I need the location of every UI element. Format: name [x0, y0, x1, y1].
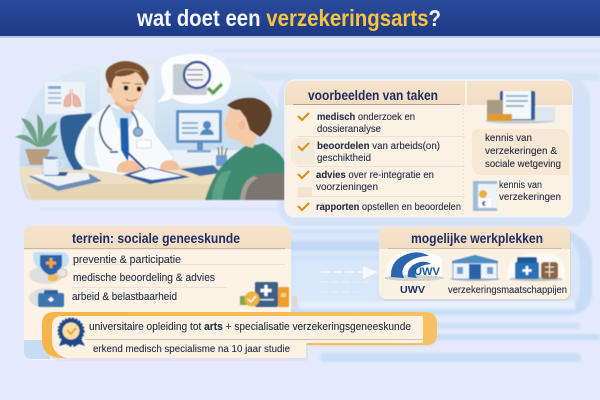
icon: books and coffee cup: [28, 156, 102, 191]
keyboard: [180, 165, 221, 176]
illustration: doctor and client consultation: [15, 54, 297, 200]
icon: verzekeringsmap: €: [482, 201, 486, 208]
arrow: naar werkplekken: [320, 266, 378, 292]
speech bubble with magnifier: [157, 54, 231, 104]
task: beoordelen: [298, 140, 440, 164]
label: UWV: UWV: [400, 285, 425, 296]
text: opleiding: universitaire opleiding tot arts + specialisatie verzekeringsgeneeskunde: [89, 321, 411, 333]
block: kennis van verzekeringen & sociale wetgeving: verzekeringen &: [485, 145, 557, 157]
heading: mogelijke werkplekken: [411, 231, 543, 246]
task: beoordelen: geschiktheid: [317, 152, 371, 164]
icon: UWV logo: UWV: [414, 266, 441, 278]
task: beoordelen: beoordelen van arbeids(on): [317, 140, 440, 152]
clipboard: [123, 167, 190, 184]
task: advies: [298, 169, 434, 193]
callout: opleiding: [42, 312, 437, 360]
icon: shield and pills: [29, 252, 69, 284]
task: medisch: medisch onderzoek en: [317, 111, 415, 123]
desk back surface: [160, 150, 240, 166]
icon: award rosette: [58, 318, 85, 347]
heading: terrein: sociale geneeskunde: [72, 231, 240, 246]
block: kennis van verzekeringen & sociale wetgeving: kennis van: [485, 132, 532, 144]
text: kennis van verzekeringen: kennis van: [499, 180, 542, 191]
list item: preventie: preventie & participatie: [73, 254, 181, 266]
monitor: [176, 110, 222, 152]
text: specialisme: erkend medisch specialisme na 10 jaar studie: [93, 343, 290, 355]
panel: mogelijke werkplekken: [379, 227, 571, 301]
pen holder: [216, 146, 227, 166]
icon: UWV logo: [384, 252, 444, 281]
task: medisch: [298, 111, 415, 135]
heading: voorbeelden van taken: [308, 87, 438, 103]
text: kennis van verzekeringen: verzekeringen: [499, 191, 561, 203]
label: verzekeringsmaatschappijen: verzekeringsmaatschappijen: [448, 285, 567, 296]
block: kennis van verzekeringen & sociale wetgeving: [472, 129, 569, 175]
icon: medical case: [29, 288, 64, 308]
doctor chair: [60, 113, 92, 170]
list item: medische beoordeling: medische beoordeling & advies: [73, 272, 215, 284]
icon: verzekeringsmap: [473, 181, 497, 211]
icon: plant: [15, 114, 58, 165]
doctor: [75, 61, 179, 175]
desk: [20, 165, 220, 200]
title text: wat doet een verzekeringsarts?: [136, 5, 441, 31]
text: kennis van verzekeringen: [499, 180, 561, 203]
icon: lung poster: [45, 82, 85, 114]
block: kennis van verzekeringen & sociale wetgeving: sociale wetgeving: [485, 158, 561, 170]
client: [205, 98, 297, 200]
task: advies: advies over re-integratie en: [316, 169, 434, 181]
icon: medical book and badge: [240, 282, 297, 307]
icon: documents: [485, 91, 555, 124]
panel: voorbeelden van taken: [285, 80, 572, 217]
task: medisch: dossieranalyse: [317, 123, 381, 135]
task: rapporten: rapporten opstellen en beoordelen: [316, 201, 461, 213]
list item: arbeid: arbeid & belastbaarheid: [72, 291, 177, 303]
title banner: [0, 0, 600, 38]
panel: terrein sociale geneeskunde: [24, 226, 297, 360]
icon: medical bag and case: [507, 254, 565, 281]
task: advies: voorzieningen: [316, 181, 378, 193]
icon: building: [450, 255, 500, 281]
